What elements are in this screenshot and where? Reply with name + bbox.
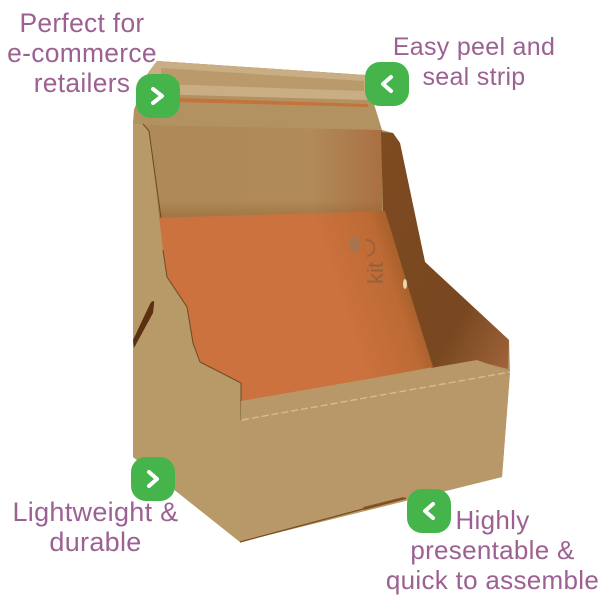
left side panel bbox=[133, 124, 242, 542]
icon: green button left arrow, bottom right bbox=[407, 489, 451, 533]
front panel bbox=[240, 360, 510, 542]
box silhouette bbox=[133, 61, 510, 542]
label: easy peel and seal strip bbox=[393, 33, 555, 91]
top flap bbox=[133, 61, 382, 131]
icon: green button right arrow, top left bbox=[136, 74, 180, 118]
label: perfect for e-commerce retailers: Perfect for bbox=[19, 8, 145, 38]
hand hole bbox=[133, 301, 154, 348]
orange book bbox=[156, 211, 433, 403]
label: perfect for e-commerce retailers: e-commerce bbox=[7, 38, 157, 68]
label: perfect for e-commerce retailers bbox=[7, 8, 157, 98]
label: highly presentable and quick to assemble: Highly bbox=[455, 505, 530, 535]
book logo: kit bbox=[363, 262, 388, 284]
right inner panel bbox=[381, 132, 509, 369]
label: perfect for e-commerce retailers: retailers bbox=[34, 68, 130, 98]
icon: green button left arrow, top right bbox=[365, 62, 409, 106]
notch on right panel bbox=[403, 279, 407, 289]
back wall bbox=[145, 125, 382, 219]
label: highly presentable and quick to assemble: quick to assemble bbox=[386, 565, 599, 595]
label: highly presentable and quick to assemble: presentable & bbox=[410, 535, 575, 565]
label: lightweight and durable: Lightweight & bbox=[12, 497, 178, 527]
label: lightweight and durable: durable bbox=[49, 527, 142, 557]
label: highly presentable and quick to assemble bbox=[386, 505, 599, 595]
label: lightweight and durable bbox=[12, 497, 178, 557]
label: easy peel and seal strip: Easy peel and bbox=[393, 33, 555, 61]
icon: green button right arrow, bottom left bbox=[131, 457, 175, 501]
label: easy peel and seal strip: seal strip bbox=[422, 63, 526, 91]
